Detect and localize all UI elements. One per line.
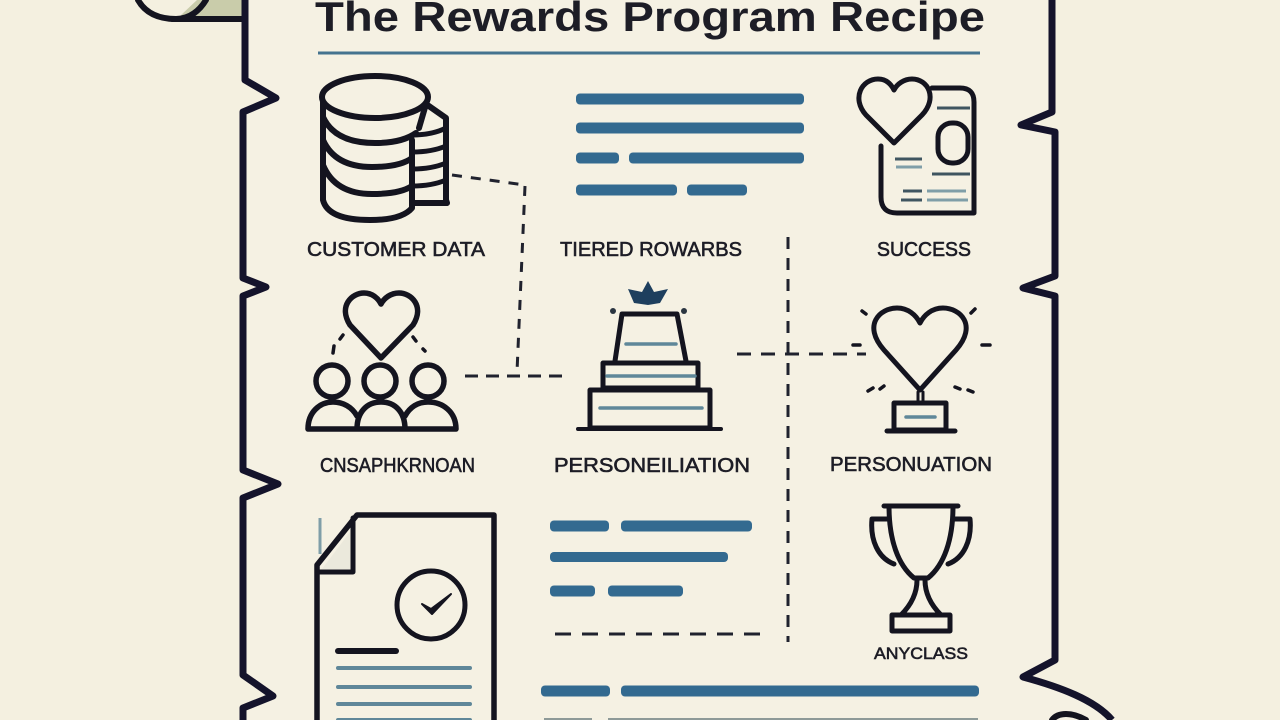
label: tiered rewards: TIERED ROWARBS: [560, 239, 742, 261]
icon: tiered cake with star: [578, 281, 721, 429]
label: anyclass: ANYCLASS: [874, 644, 968, 663]
icon: heart trophy with rays: [853, 308, 990, 431]
title underline: [318, 52, 980, 54]
icon: customer data database: [322, 76, 447, 220]
label: personalization: PERSONEILIATION: [554, 455, 750, 477]
connector: dashed lines: [452, 175, 866, 642]
label: personalization right: PERSONUATION: [830, 454, 992, 476]
icon: community heart and people: [308, 293, 456, 429]
icon: document with check: [317, 515, 494, 720]
bars: top text block: [576, 94, 804, 196]
label: community: CNSAPHKRNOAN: [320, 455, 475, 477]
bars: middle text block: [550, 520, 752, 596]
panel: parchment scroll: [138, 0, 1112, 720]
label: success: SUCCESS: [877, 239, 971, 261]
label: customer data: CUSTOMER DATA: [307, 239, 486, 261]
bars: bottom text block: [541, 686, 979, 720]
icon: heart and loyalty card: [859, 79, 974, 213]
icon: trophy: [872, 506, 970, 631]
